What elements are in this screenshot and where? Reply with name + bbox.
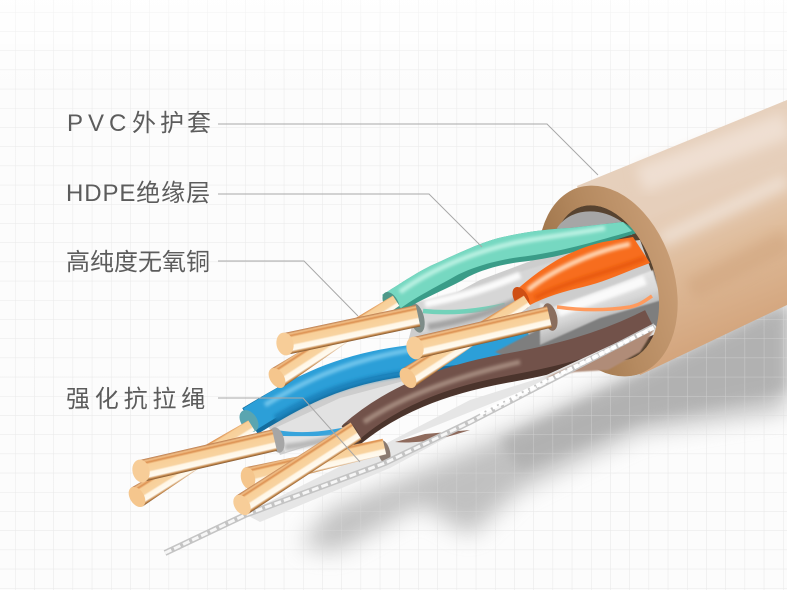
copper: orange pair back bbox=[396, 291, 533, 391]
brown-white wire bbox=[375, 430, 470, 465]
copper: green pair back bbox=[265, 291, 402, 391]
copper: brown pair front bbox=[230, 422, 362, 518]
strength rope sheet bbox=[245, 325, 660, 522]
copper: brown pair back bbox=[239, 436, 387, 490]
cable end ring behind the wires bbox=[515, 167, 701, 395]
copper conductors bbox=[125, 291, 552, 518]
blue-white wire bbox=[267, 426, 346, 454]
twisted wire bundle bbox=[165, 211, 662, 553]
blue wire bbox=[236, 341, 530, 435]
leader line: HDPE insulation bbox=[218, 194, 482, 247]
leader line: PVC jacket bbox=[218, 124, 598, 175]
label: strength rope: 强化抗拉绳 bbox=[66, 386, 210, 413]
dark grey wedge over blue end bbox=[495, 292, 660, 362]
grey insulation filler bbox=[268, 211, 662, 455]
leader line: copper bbox=[218, 261, 358, 316]
copper: blue pair front bbox=[130, 429, 277, 484]
label: PVC jacket: PVC外护套 bbox=[67, 110, 211, 137]
brown wire bbox=[339, 320, 650, 448]
orange wire bbox=[509, 237, 650, 312]
green-white wire bbox=[407, 262, 600, 334]
label: copper: 高纯度无氧铜 bbox=[66, 249, 210, 276]
label: HDPE insulation: HDPE绝缘层 bbox=[66, 180, 211, 207]
copper: green pair front bbox=[274, 304, 420, 357]
orange-white wire bbox=[540, 270, 662, 345]
copper: blue pair back bbox=[125, 416, 257, 510]
leader line: strength rope bbox=[218, 398, 360, 462]
strength rope bbox=[165, 326, 655, 553]
green wire bbox=[379, 222, 640, 317]
PVC jacket body and front of ring bbox=[574, 100, 787, 376]
copper: orange pair front bbox=[404, 306, 552, 361]
